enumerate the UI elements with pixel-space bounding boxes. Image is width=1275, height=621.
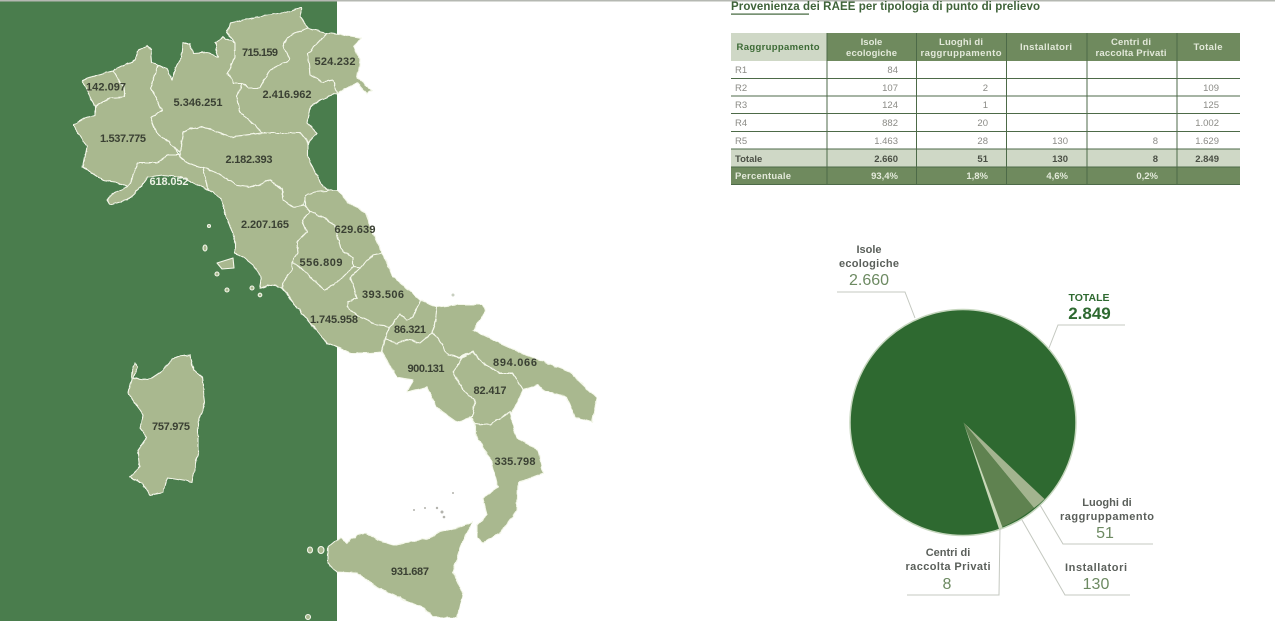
pie chart [850, 310, 1076, 536]
table header row: ecologiche [846, 48, 897, 59]
region: Piemonte [73, 45, 179, 187]
region: Liguria [107, 155, 208, 205]
table rows R1 to R5: 1.463 [874, 136, 898, 147]
table rows R1 to R5: 882 [882, 118, 898, 129]
region: Marche [305, 190, 382, 268]
region: Emilia-Romagna [180, 127, 330, 207]
percentage row: 93,4% [871, 171, 899, 182]
callout: totale [1049, 292, 1125, 348]
totals row: 8 [1153, 154, 1158, 165]
callout: Isole ecologiche: ecologiche [839, 258, 899, 270]
percentage row: 4,6% [1046, 171, 1069, 182]
region value labels: 5.346.251 [174, 97, 222, 109]
region value labels: 142.097 [86, 82, 126, 94]
region: Puglia [432, 305, 597, 422]
region value labels: 931.687 [391, 566, 429, 578]
table rows R1 to R5 [735, 65, 1219, 147]
region: Campania [382, 333, 475, 422]
region: Veneto [237, 28, 337, 143]
region: Trentino-Alto Adige [227, 7, 308, 88]
callout: Isole ecologiche: 2.660 [849, 272, 889, 289]
heading: Provenienza dei RAEE per tipologia di punto di prelievo [731, 1, 1040, 13]
table rows R1 to R5: 125 [1203, 100, 1219, 111]
region: Calabria [475, 412, 543, 543]
percentage row: Percentuale [735, 171, 791, 182]
table rows R1 to R5: 2 [983, 83, 988, 94]
table rules [731, 33, 1240, 185]
table rows R1 to R5: R2 [735, 83, 747, 94]
region: Sicilia [328, 522, 473, 618]
totals row: 2.660 [874, 154, 898, 165]
table header row: raggruppamento [920, 48, 1002, 59]
callout: Isole ecologiche [837, 244, 915, 318]
region: Umbria [292, 212, 353, 290]
region value labels: 1.537.775 [100, 133, 146, 145]
table header row: Installatori [1020, 42, 1072, 53]
region value labels: 82.417 [474, 385, 506, 397]
callout: totale: 2.849 [1068, 304, 1111, 323]
region shapes [73, 7, 597, 618]
region: Molise [385, 300, 437, 343]
table header row: Centri di [1111, 37, 1151, 48]
region value labels: 757.975 [152, 421, 190, 433]
region value labels: 2.182.393 [226, 154, 272, 166]
percentage row: 1,8% [966, 171, 989, 182]
callout: Luoghi di raggruppamento: raggruppamento [1060, 511, 1154, 523]
region value labels: 2.207.165 [241, 219, 289, 231]
table header row: Isole [861, 37, 882, 48]
minor islands [203, 224, 454, 620]
table rows R1 to R5: R3 [735, 100, 747, 111]
callout: Centri di raccolta Privati: raccolta Privati [906, 561, 990, 573]
table rows R1 to R5: 107 [882, 83, 898, 94]
region value labels: 86.321 [394, 324, 426, 336]
slice: Centri di raccolta Privati [964, 422, 1002, 529]
callout: Centri di raccolta Privati: 8 [943, 576, 952, 593]
region: Basilicata [453, 352, 523, 425]
totals row: Totale [735, 154, 762, 165]
region value labels: 894.066 [493, 357, 537, 369]
callout: totale: TOTALE [1068, 292, 1110, 304]
table rows R1 to R5: 28 [977, 136, 988, 147]
totals and percentage row backgrounds [731, 150, 1240, 185]
region value labels: 1.745.958 [310, 314, 358, 326]
callout: Installatori: Installatori [1065, 562, 1127, 574]
table header row [731, 33, 1240, 61]
table header row: Raggruppamento [736, 42, 820, 53]
totals row: 2.849 [1195, 154, 1219, 165]
data table [731, 33, 1240, 185]
region: Lazio [282, 262, 390, 353]
table rows R1 to R5: R5 [735, 136, 747, 147]
region: Abruzzo [347, 253, 420, 327]
region value labels: 618.052 [150, 176, 188, 188]
table rows R1 to R5: 130 [1052, 136, 1068, 147]
table rows R1 to R5: 1.002 [1195, 118, 1219, 129]
region: Valle d'Aosta [82, 71, 125, 107]
percentage row: 0,2% [1136, 171, 1159, 182]
region value labels: 715.159 [242, 47, 278, 59]
slice: Luoghi di raggruppamento [964, 422, 1044, 508]
region value labels: 335.798 [494, 456, 536, 468]
percentage row [735, 171, 1159, 182]
totals row: 130 [1052, 154, 1068, 165]
region: Toscana [203, 168, 310, 288]
table rows R1 to R5: 1 [983, 100, 988, 111]
region value labels: 629.639 [334, 224, 376, 236]
totals row [735, 154, 1219, 165]
callout: Luoghi di raggruppamento: 51 [1096, 525, 1114, 542]
region value labels: 556.809 [300, 257, 342, 269]
table rows R1 to R5: 84 [887, 65, 898, 76]
region value labels: 524.232 [314, 56, 356, 68]
map of Italy by region [73, 7, 597, 620]
table header row: raccolta Privati [1096, 48, 1166, 59]
table header row: Luoghi di [939, 37, 983, 48]
callout: Centri di raccolta Privati [906, 528, 1000, 595]
callout: Installatori: 130 [1083, 576, 1109, 593]
region value labels: 2.416.962 [262, 89, 312, 101]
callout: Centri di raccolta Privati: Centri di [926, 547, 970, 559]
table rows R1 to R5: 109 [1203, 83, 1219, 94]
table rows R1 to R5: 20 [977, 118, 988, 129]
callout: Luoghi di raggruppamento: Luoghi di [1082, 497, 1132, 509]
totals row: 51 [977, 154, 989, 165]
panel: green map background [0, 0, 337, 621]
region value labels: 393.506 [362, 289, 404, 301]
region value labels: 900.131 [408, 363, 444, 375]
callout: Installatori [1022, 520, 1130, 595]
slice: Installatori [964, 422, 1034, 527]
callout: Luoghi di raggruppamento [1040, 497, 1154, 544]
region: Lombardia [151, 37, 263, 153]
region: Sardegna [128, 355, 205, 495]
table header row: Totale [1194, 42, 1222, 53]
table rows R1 to R5: 124 [882, 100, 898, 111]
table rows R1 to R5: R4 [735, 118, 747, 129]
callout: Isole ecologiche: Isole [856, 244, 882, 256]
table rows R1 to R5: 8 [1153, 136, 1158, 147]
table rows R1 to R5: 1.629 [1195, 136, 1219, 147]
region: Friuli-Venezia Giulia [308, 33, 372, 94]
table rows R1 to R5: R1 [735, 65, 747, 76]
region value labels [86, 47, 537, 578]
